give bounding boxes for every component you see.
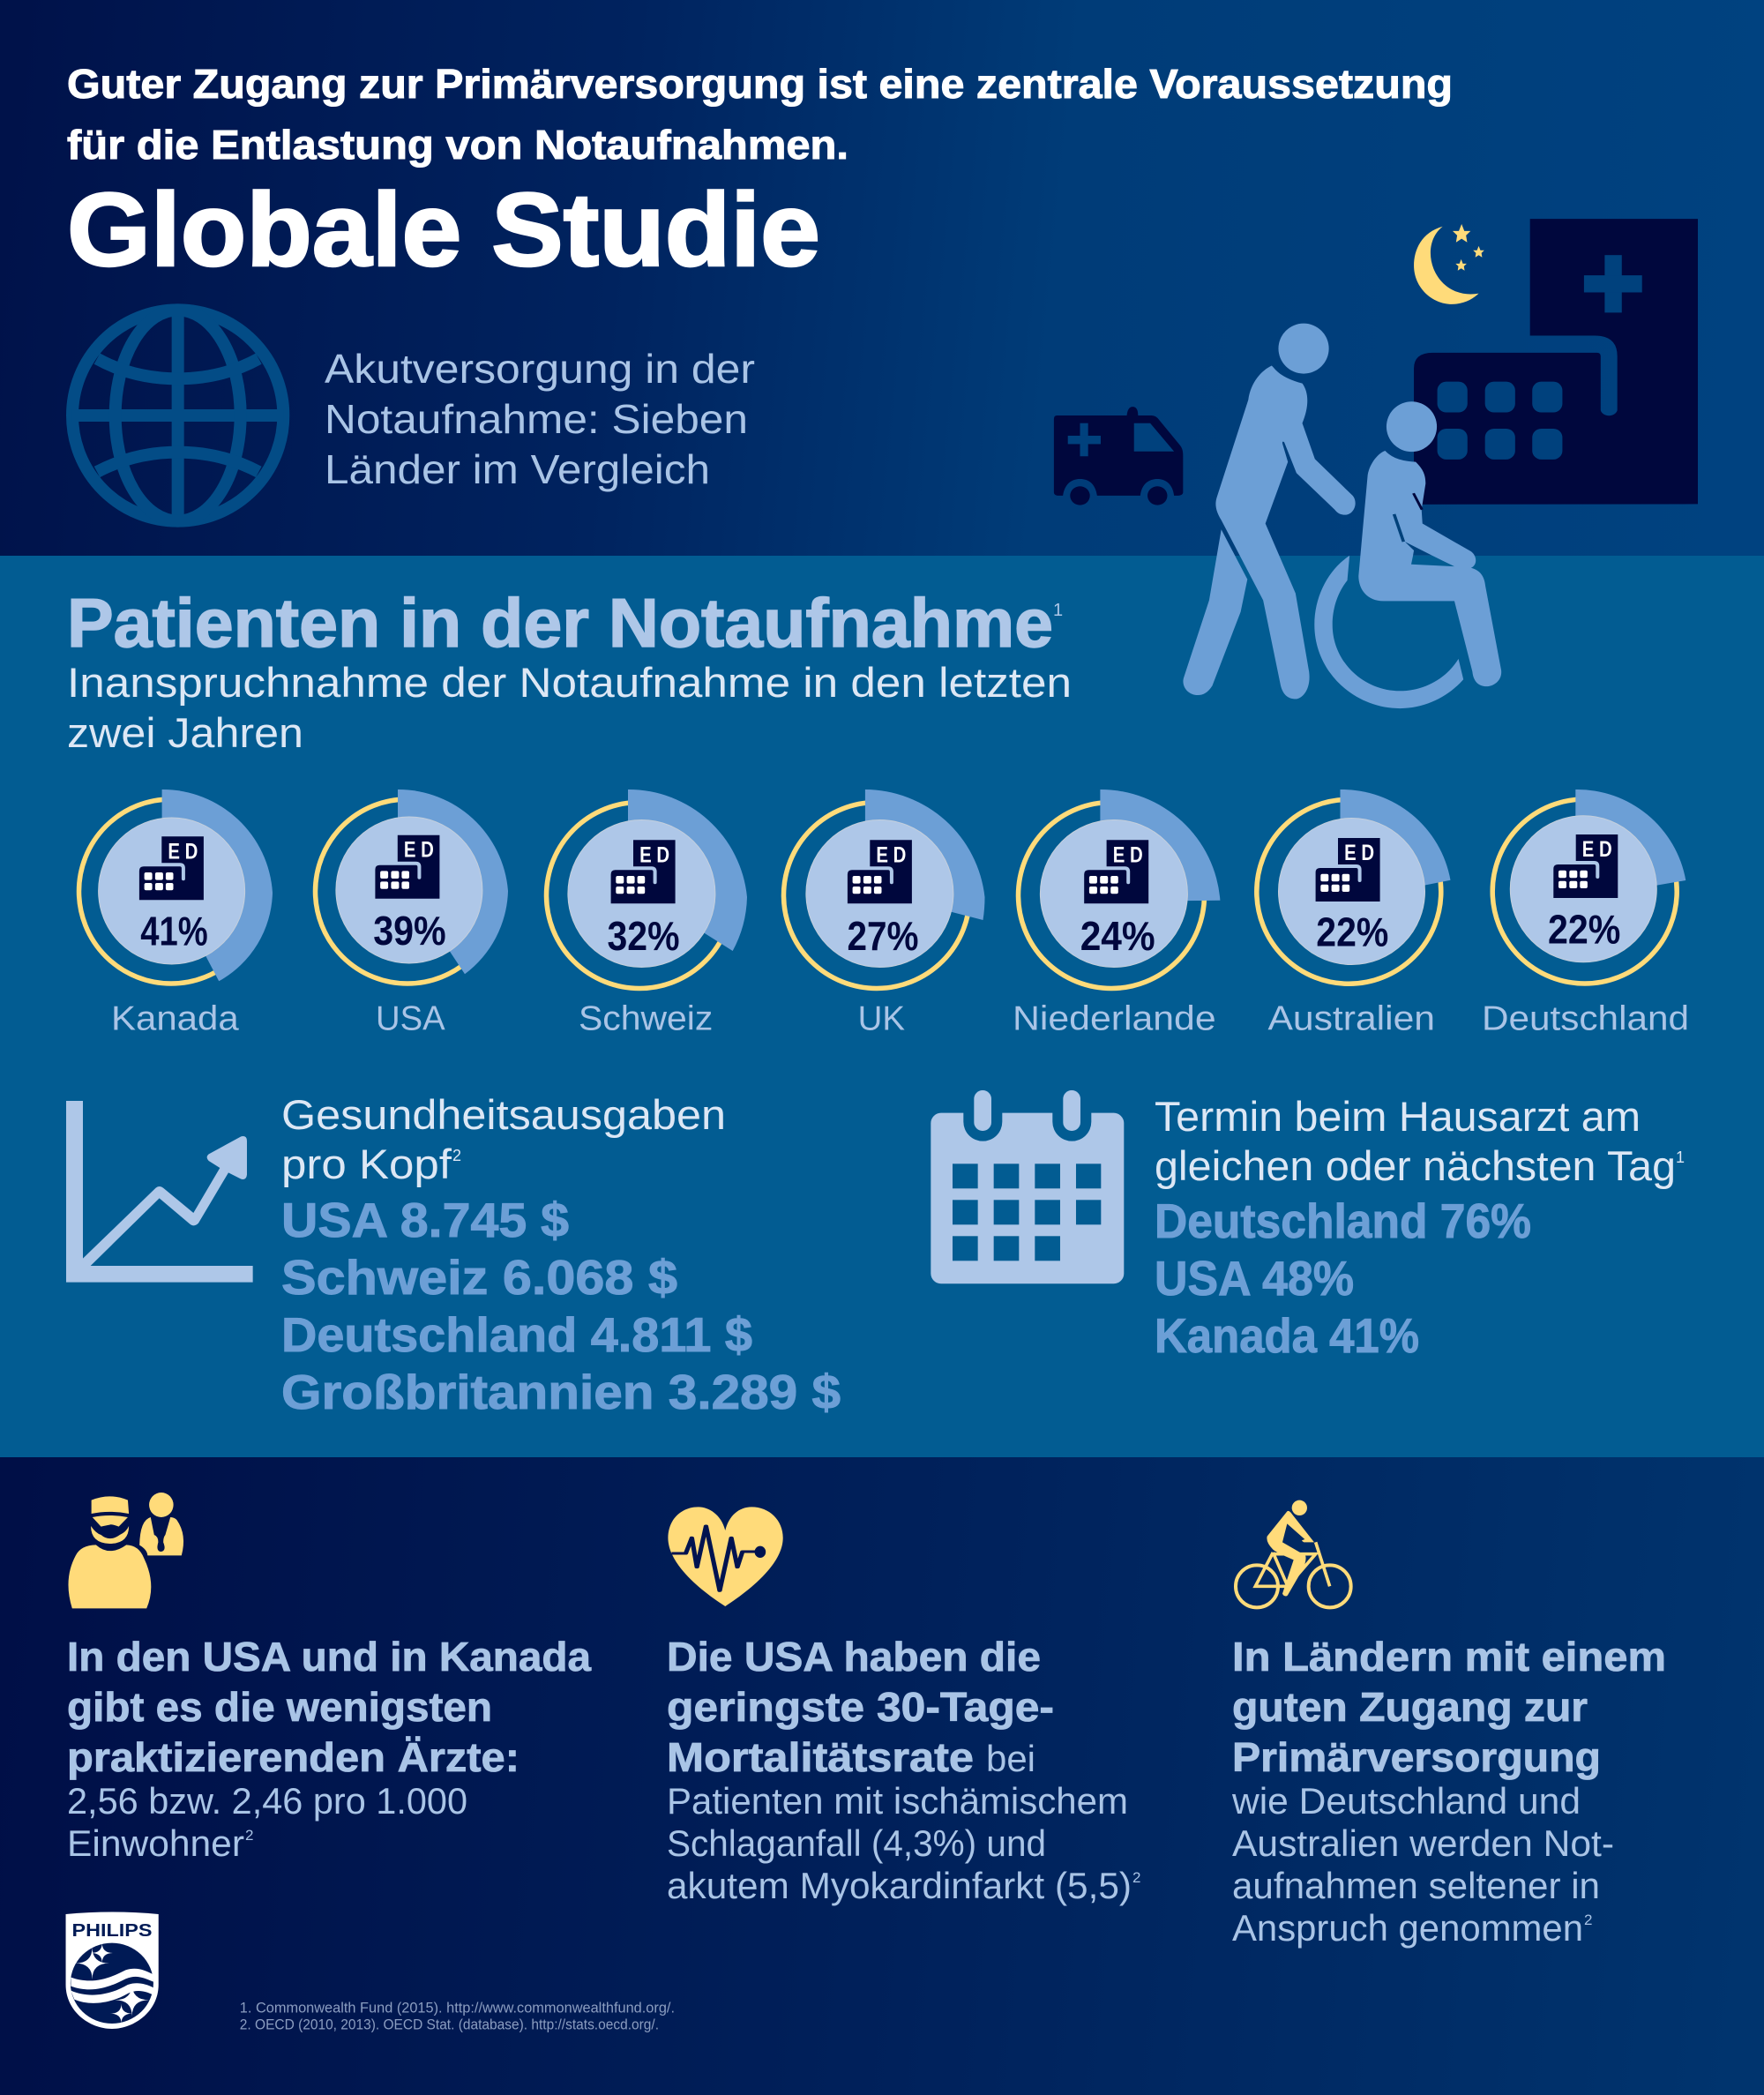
text: health spending label: pro Kopf [281,1141,452,1187]
icon: heart with pulse [668,1507,783,1606]
text: next-day appointment label: Termin beim Hausarzt am [1155,1093,1641,1140]
icon: walking caregiver [1183,324,1356,699]
text: next-day appointment label: 1 [1676,1149,1685,1166]
donut chart: UK 27%: E D [876,842,906,867]
donut chart: Schweiz 32% [547,789,747,1037]
footnotes: 2. OECD (2010, 2013). OECD Stat. (database). http://stats.oecd.org/. [240,2017,659,2033]
text: mortality fact: 2 [1132,1869,1140,1886]
text: next-day appointment values: USA 48% [1155,1251,1354,1306]
text: health spending values: USA 8.745 $ [281,1193,569,1247]
footnotes [240,2001,675,2033]
icon: patient in wheelchair [1314,401,1501,708]
intro heading: für die Entlastung von Notaufnahmen. [67,122,848,168]
icon: moon and stars [1414,224,1484,304]
text: health spending values: Deutschland 4.811 $ [281,1307,752,1362]
text: primary care fact: aufnahmen seltener in [1232,1865,1600,1906]
icon: cyclist [1236,1500,1351,1607]
donut chart: Kanada 41%: Kanada [111,999,239,1037]
text: health spending label: Gesundheitsausgaben [281,1091,726,1138]
text: doctors fact: gibt es die wenigsten [67,1684,492,1730]
text: next-day appointment values: Deutschland 76% [1155,1193,1531,1248]
section heading: patients: 1 [1053,601,1063,620]
donut chart: Australien 22% [1257,789,1450,1037]
section subheading: zwei Jahren [67,709,303,756]
icon: rising line chart [66,1101,253,1283]
panel: middle statistics background [0,556,1764,1457]
donut chart: Deutschland 22%: 22% [1548,906,1620,952]
donut chart: USA 39%: E D [404,838,434,863]
text: mortality fact: Schlaganfall (4,3%) und [667,1822,1046,1864]
text: doctors fact: In den USA und in Kanada [67,1634,591,1680]
icon: globe [72,310,283,521]
text: mortality fact: akutem Myokardinfarkt (5,5) [667,1865,1132,1906]
text: health spending values: Schweiz 6.068 $ [281,1250,677,1305]
donut chart: Kanada 41%: 41% [140,909,208,954]
section subheading [67,659,1072,756]
donut chart: Deutschland 22%: Deutschland [1482,999,1689,1037]
section subheading: Inanspruchnahme der Notaufnahme in den letzten [67,659,1072,706]
text: doctors fact: Einwohner [67,1822,244,1864]
text: primary care fact [1231,1634,1666,1949]
donut chart: Schweiz 32%: Schweiz [579,999,713,1037]
subtitle text: Notaufnahme: Sieben [325,396,748,442]
donut chart: Niederlande 24%: E D [1113,842,1143,867]
panel: top header background [0,0,1764,557]
donut chart: Niederlande 24%: 24% [1080,913,1155,959]
icon: doctors [68,1493,183,1608]
donut chart: Schweiz 32%: E D [639,842,669,867]
donut chart: UK 27% [783,789,984,1037]
panel: bottom facts background [0,1457,1764,2095]
text: mortality fact: Mortalitätsrate [667,1734,974,1780]
donut chart: Deutschland 22% [1482,789,1689,1037]
intro heading [67,61,1453,168]
donut chart: Australien 22%: Australien [1268,999,1435,1037]
donut chart: USA 39%: USA [376,999,445,1037]
logo: Philips shield: PHILIPS [72,1921,152,1941]
text: health spending label [281,1091,726,1187]
text: doctors fact [67,1634,591,1864]
text: mortality fact [667,1634,1140,1906]
text: primary care fact: Australien werden Not- [1232,1822,1614,1864]
text: mortality fact: Die USA haben die [667,1634,1041,1680]
illustration: night hospital scene [1054,219,1698,708]
donut chart: UK 27%: 27% [847,913,919,959]
text: primary care fact: Anspruch genommen [1232,1907,1583,1949]
subtitle text [325,346,755,492]
subtitle text: Akutversorgung in der [325,346,755,392]
text: primary care fact: wie Deutschland und [1231,1780,1581,1822]
text: primary care fact: Primärversorgung [1232,1734,1601,1780]
text: next-day appointment values: Kanada 41% [1155,1308,1419,1363]
text: health spending label: 2 [452,1147,461,1164]
footnotes: 1. Commonwealth Fund (2015). http://www.commonwealthfund.org/. [240,2001,675,2016]
donut chart: Australien 22%: E D [1344,841,1374,865]
text: doctors fact: 2 [245,1827,253,1844]
donut chart: USA 39%: 39% [373,908,446,954]
text: primary care fact: 2 [1584,1912,1592,1928]
subtitle text: Länder im Vergleich [325,446,710,492]
text: primary care fact: guten Zugang zur [1232,1684,1588,1730]
text: health spending values: Großbritannien 3.289 $ [281,1365,841,1419]
text: next-day appointment values [1155,1193,1531,1363]
text: health spending values [281,1193,841,1419]
intro heading: Guter Zugang zur Primärversorgung ist eine zentrale Voraussetzung [67,61,1453,107]
icon: calendar [931,1090,1124,1283]
donut chart: Deutschland 22%: E D [1582,837,1612,862]
donut chart: Niederlande 24% [1013,789,1220,1037]
icon: hospital [1414,219,1698,505]
text: primary care fact: In Ländern mit einem [1232,1634,1666,1680]
text: next-day appointment label [1155,1093,1685,1189]
donut chart: USA 39% [316,789,508,1037]
donut chart: Niederlande 24%: Niederlande [1013,999,1216,1037]
text: mortality fact: Patienten mit ischämischem [667,1780,1128,1822]
donut chart: Schweiz 32%: 32% [607,913,679,959]
text: doctors fact: praktizierenden Ärzte: [67,1734,519,1780]
section heading: patients: Patienten in der Notaufnahme [67,584,1053,662]
text: next-day appointment label: gleichen oder nächsten Tag [1155,1142,1676,1189]
icon: ambulance [1054,407,1183,505]
donut chart: Kanada 41%: E D [168,839,198,864]
text: doctors fact: 2,56 bzw. 2,46 pro 1.000 [67,1780,467,1822]
donut chart: UK 27%: UK [858,999,905,1037]
donut chart: Australien 22%: 22% [1316,909,1388,954]
title: Globale Studie [67,172,820,288]
donut chart: Kanada 41% [79,789,273,1037]
text: mortality fact: geringste 30-Tage- [667,1684,1054,1730]
text: mortality fact: bei [986,1738,1035,1779]
logo: Philips shield [66,1912,159,2029]
